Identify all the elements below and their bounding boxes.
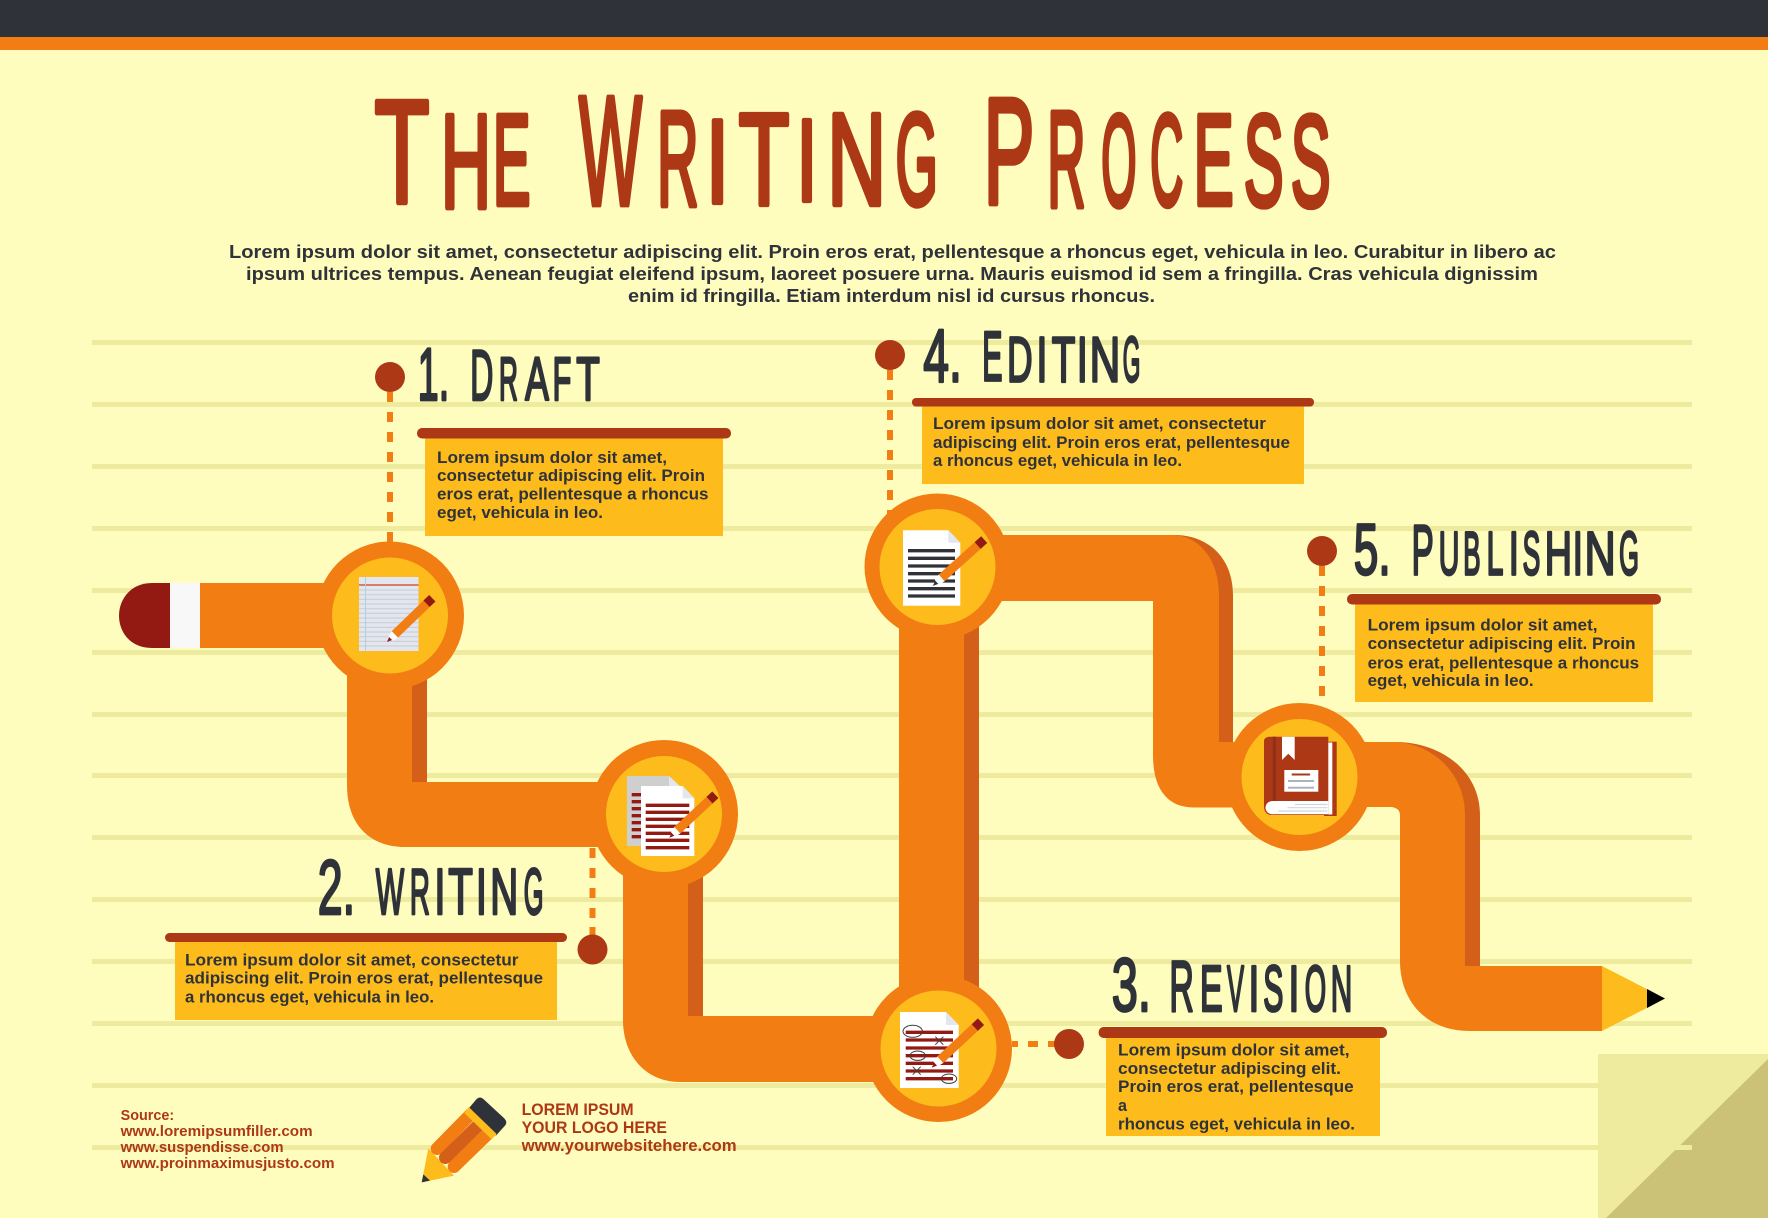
heading: 4. Editing: T — [1052, 324, 1075, 396]
heading: 2. Writing: 2. — [318, 845, 355, 931]
text box: editing: a rhoncus eget, vehicula in leo. — [933, 452, 1182, 470]
heading: 5. Publishing: B — [1463, 520, 1480, 588]
pencil tip — [1602, 966, 1665, 1031]
heading: 5. Publishing: U — [1439, 521, 1459, 589]
heading: 1. Draft — [418, 334, 600, 416]
logo text: www.yourwebsitehere.com — [521, 1136, 737, 1155]
text box: draft: eros erat, pellentesque a rhoncus — [437, 486, 708, 504]
heading: 5. Publishing: I — [1509, 520, 1519, 588]
heading: 3. Revision: R — [1169, 946, 1194, 1026]
heading: 3. Revision: I — [1288, 953, 1299, 1025]
heading: 2. Writing: N — [490, 857, 518, 928]
heading: 5. Publishing: P — [1412, 511, 1434, 590]
title: S — [1244, 89, 1284, 234]
logo pencil icon — [422, 1097, 506, 1182]
heading: 1. Draft: T — [576, 345, 600, 413]
text box: editing: Lorem ipsum dolor sit amet, consectetur — [933, 415, 1267, 433]
text box: writing: Lorem ipsum dolor sit amet, consectetur — [185, 952, 519, 970]
heading: 2. Writing: R — [410, 855, 430, 928]
top header band — [0, 0, 1768, 50]
intro paragraph: ipsum ultrices tempus. Aenean feugiat eleifend ipsum, laoreet posuere urna. Mauris euismod id sem a fringilla. Cras vehicula dignissim — [246, 263, 1538, 284]
heading: 3. Revision: I — [1248, 953, 1259, 1025]
connector: editing — [875, 340, 905, 516]
title: O — [1101, 88, 1136, 234]
title: N — [827, 87, 886, 233]
heading: 2. Writing: T — [448, 856, 473, 928]
text box: writing: adipiscing elit. Proin eros erat, pellentesque — [185, 970, 543, 988]
heading: 2. Writing — [318, 845, 544, 931]
title: T — [739, 88, 789, 233]
text box: revision: a — [1118, 1097, 1128, 1115]
step 1 node: lined notepad icon — [316, 542, 464, 690]
text box: publishing: eros erat, pellentesque a rhoncus — [1368, 654, 1639, 672]
title: I — [797, 95, 817, 226]
heading: 5. Publishing: L — [1487, 521, 1503, 589]
step 3 node: marked up document icon — [865, 975, 1012, 1122]
text box: publishing: Lorem ipsum dolor sit amet, — [1368, 616, 1598, 634]
folded paper corner — [1598, 1054, 1768, 1218]
pencil ferrule — [170, 583, 200, 648]
text box: publishing — [1347, 594, 1661, 702]
source list: www.proinmaximusjusto.com — [120, 1156, 335, 1172]
heading: 4. Editing: N — [1090, 324, 1120, 396]
heading: 4. Editing: I — [1077, 325, 1088, 396]
heading: 5. Publishing: G — [1619, 520, 1639, 588]
intro paragraph — [229, 241, 1556, 306]
text box: writing — [165, 933, 567, 1020]
text box: revision: Proin eros erat, pellentesque — [1118, 1078, 1354, 1096]
heading: 3. Revision: N — [1331, 952, 1352, 1025]
text box: revision: Lorem ipsum dolor sit amet, — [1118, 1042, 1350, 1060]
heading: 3. Revision — [1112, 944, 1352, 1028]
title: R — [1047, 83, 1085, 236]
text box: publishing: consectetur adipiscing elit. Proin — [1368, 635, 1636, 653]
source list: www.suspendisse.com — [120, 1140, 284, 1156]
step 2 node: stacked documents icon — [590, 740, 738, 888]
heading: 1. Draft: 1. — [418, 334, 449, 416]
title: G — [896, 87, 938, 233]
pencil lead — [1647, 989, 1665, 1008]
heading: 4. Editing: G — [1123, 324, 1140, 396]
heading: 1. Draft: D — [470, 336, 493, 415]
heading: 1. Draft: F — [553, 346, 571, 414]
source list: www.loremipsumfiller.com — [120, 1124, 313, 1140]
heading: 3. Revision: S — [1263, 952, 1283, 1025]
heading: 3. Revision: 3. — [1112, 944, 1151, 1028]
pencil eraser — [119, 583, 170, 648]
source list — [120, 1108, 335, 1172]
heading: 2. Writing: I — [434, 856, 445, 928]
intro paragraph: Lorem ipsum dolor sit amet, consectetur adipiscing elit. Proin eros erat, pellentesque a rhoncus eget, vehicula in leo. Curabitur in libero ac — [229, 241, 1556, 262]
heading: 4. Editing — [923, 314, 1140, 398]
text box: revision: rhoncus eget, vehicula in leo. — [1118, 1116, 1355, 1134]
text box: revision — [1099, 1027, 1387, 1136]
intro paragraph: enim id fringilla. Etiam interdum nisl id cursus rhoncus. — [628, 285, 1155, 306]
text box: draft: Lorem ipsum dolor sit amet, — [437, 449, 667, 467]
heading: 5. Publishing: H — [1545, 519, 1572, 588]
title: W — [579, 66, 642, 238]
heading: 2. Writing: G — [524, 856, 544, 928]
title: I — [706, 95, 729, 228]
heading: 2. Writing: W — [376, 855, 404, 928]
title: S — [1291, 89, 1331, 234]
text box: draft — [417, 428, 731, 536]
heading: 4. Editing: 4. — [923, 314, 962, 398]
pipe segments — [200, 535, 1602, 1082]
heading: 3. Revision: E — [1200, 953, 1223, 1026]
heading: 4. Editing: D — [1007, 323, 1033, 395]
title: R — [657, 84, 699, 235]
text box: writing: a rhoncus eget, vehicula in leo. — [185, 988, 434, 1006]
heading: 5. Publishing: 5. — [1354, 510, 1391, 590]
heading: 1. Draft: R — [499, 345, 518, 413]
heading: 1. Draft: A — [525, 345, 549, 413]
heading: 5. Publishing — [1354, 510, 1639, 590]
title: E — [1194, 89, 1234, 233]
text box: draft: consectetur adipiscing elit. Proin — [437, 467, 705, 485]
text box: revision: consectetur adipiscing elit. — [1118, 1060, 1341, 1078]
heading: 5. Publishing: N — [1584, 520, 1616, 588]
step 5 node: book icon — [1226, 703, 1374, 851]
title: P — [984, 68, 1034, 236]
heading: 5. Publishing: I — [1573, 520, 1583, 588]
text box: draft: eget, vehicula in leo. — [437, 504, 603, 522]
connector: publishing — [1307, 536, 1337, 696]
connector: revision — [1012, 1029, 1084, 1059]
text box: publishing: eget, vehicula in leo. — [1368, 672, 1534, 690]
heading: 4. Editing: E — [982, 317, 1003, 396]
logo text — [521, 1100, 737, 1155]
logo text: LOREM IPSUM — [522, 1100, 634, 1119]
heading: 3. Revision: O — [1305, 952, 1326, 1025]
step 4 node: typed document icon — [864, 494, 1010, 640]
heading: 5. Publishing: S — [1523, 520, 1540, 588]
title: H — [441, 87, 491, 236]
source list: Source: — [121, 1108, 174, 1124]
connector: writing — [578, 848, 608, 964]
pencil-shaped path — [119, 535, 1665, 1082]
title: T — [374, 70, 430, 234]
pencil shaft shadows — [412, 535, 1480, 1048]
heading: 4. Editing: I — [1036, 325, 1047, 396]
title: C — [1150, 88, 1183, 233]
title — [374, 66, 1331, 238]
text box: editing — [912, 398, 1314, 484]
heading: 3. Revision: V — [1227, 953, 1244, 1025]
text box: editing: adipiscing elit. Proin eros erat, pellentesque — [933, 434, 1290, 452]
title: E — [493, 89, 531, 233]
connector: draft — [375, 362, 405, 542]
logo text: YOUR LOGO HERE — [522, 1118, 667, 1137]
heading: 2. Writing: I — [476, 856, 487, 928]
